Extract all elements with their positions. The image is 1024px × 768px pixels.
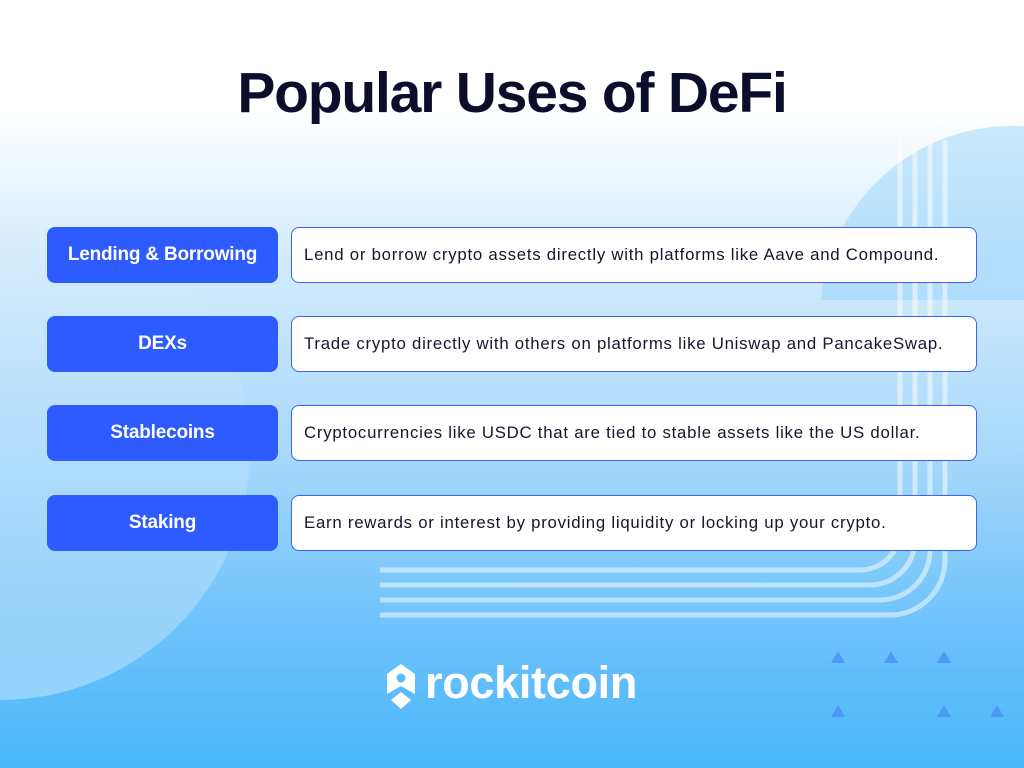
row: stablecoins description: Cryptocurrencies like USDC that are tied to stable assets like the US dollar.	[304, 423, 920, 442]
title: Popular Uses of DeFi	[237, 61, 787, 125]
row: lending label	[47, 227, 278, 283]
logo	[387, 657, 637, 709]
row: lending label: Lending & Borrowing	[68, 244, 257, 265]
row: lending description: Lend or borrow crypto assets directly with platforms like Aave and Compound.	[304, 245, 939, 264]
icon: rocket	[387, 664, 415, 709]
row: DEXs label	[47, 316, 278, 372]
row: stablecoins description	[291, 405, 977, 461]
row: stablecoins label: Stablecoins	[110, 422, 215, 443]
row: lending description	[291, 227, 977, 283]
row: DEXs description	[291, 316, 977, 372]
row: staking label: Staking	[129, 512, 196, 533]
row: stablecoins label	[47, 405, 278, 461]
logo text: rockitcoin	[425, 657, 637, 708]
row: staking description: Earn rewards or interest by providing liquidity or locking up your crypto.	[304, 513, 886, 532]
row: DEXs label: DEXs	[138, 333, 187, 354]
row: DEXs description: Trade crypto directly with others on platforms like Uniswap and PancakeSwap.	[304, 334, 943, 353]
row: staking label	[47, 495, 278, 551]
row: staking description	[291, 495, 977, 551]
